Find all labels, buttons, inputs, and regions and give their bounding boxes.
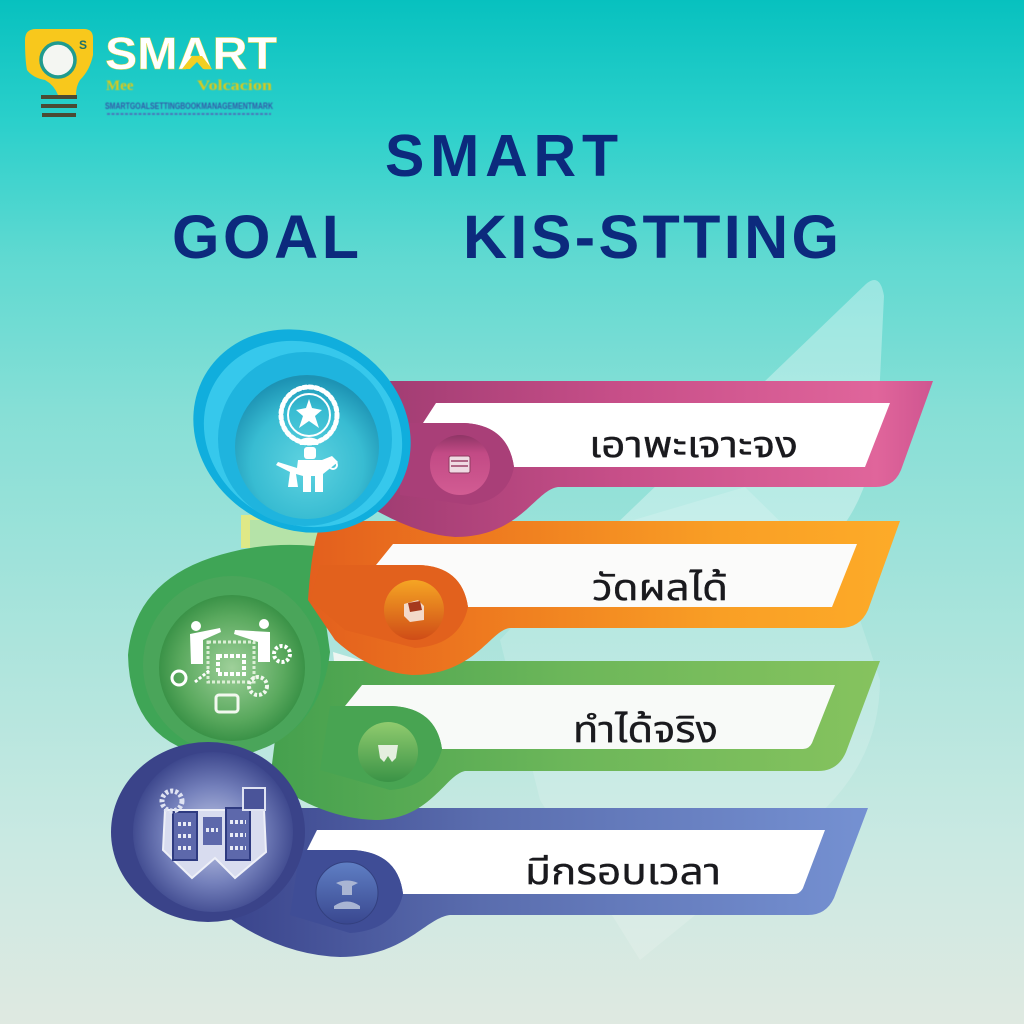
label text: เอาพะเจาะจง: [589, 424, 798, 465]
small circle: [430, 435, 490, 495]
icon: light bulb: [25, 29, 93, 117]
logo tagline: Volcacion: [197, 78, 273, 94]
title line 2 right: KIS-STTING: [463, 203, 839, 271]
icon: open panels: [162, 788, 266, 878]
logo tagline: Mee: [106, 78, 134, 94]
logo: [25, 28, 277, 117]
white label: [423, 403, 890, 467]
small circle: [384, 580, 444, 640]
small circle: [316, 862, 378, 924]
logo tagline: [106, 78, 273, 94]
background sliver between orange and green: [333, 652, 363, 661]
icon: gear and person: [276, 387, 338, 492]
icon: light bulb: S: [79, 38, 87, 52]
ribbon: orange, measurable: [308, 521, 900, 675]
circle: blue, target person icon: [156, 290, 448, 572]
circle: navy, calendar shield icon: [111, 742, 305, 922]
white label: [345, 685, 835, 749]
logo small print: SMARTGOALSETTINGBOOKMANAGEMENTMARK: [105, 101, 273, 111]
label text: มีกรอบเวลา: [525, 851, 721, 892]
ribbon: pink, specific: [375, 381, 933, 537]
white label: [376, 544, 857, 607]
logo wordmark: SMART: [105, 28, 277, 79]
ribbon: green, achievable: [270, 661, 880, 820]
title: [172, 123, 839, 271]
decorative wing shape: [500, 280, 884, 960]
small circle: [358, 722, 418, 782]
label text: วัดผลได้: [592, 567, 728, 608]
label text: ทำได้จริง: [573, 709, 718, 750]
title line 1: SMART: [385, 123, 618, 189]
ribbon: navy, time-bound: [225, 808, 868, 957]
circle: green, team icon: [128, 545, 330, 758]
icon: two people and board: [172, 619, 290, 712]
yellow tab behind green circle: [241, 515, 300, 548]
title line 2 left: GOAL: [172, 203, 359, 271]
white label: [307, 830, 825, 894]
